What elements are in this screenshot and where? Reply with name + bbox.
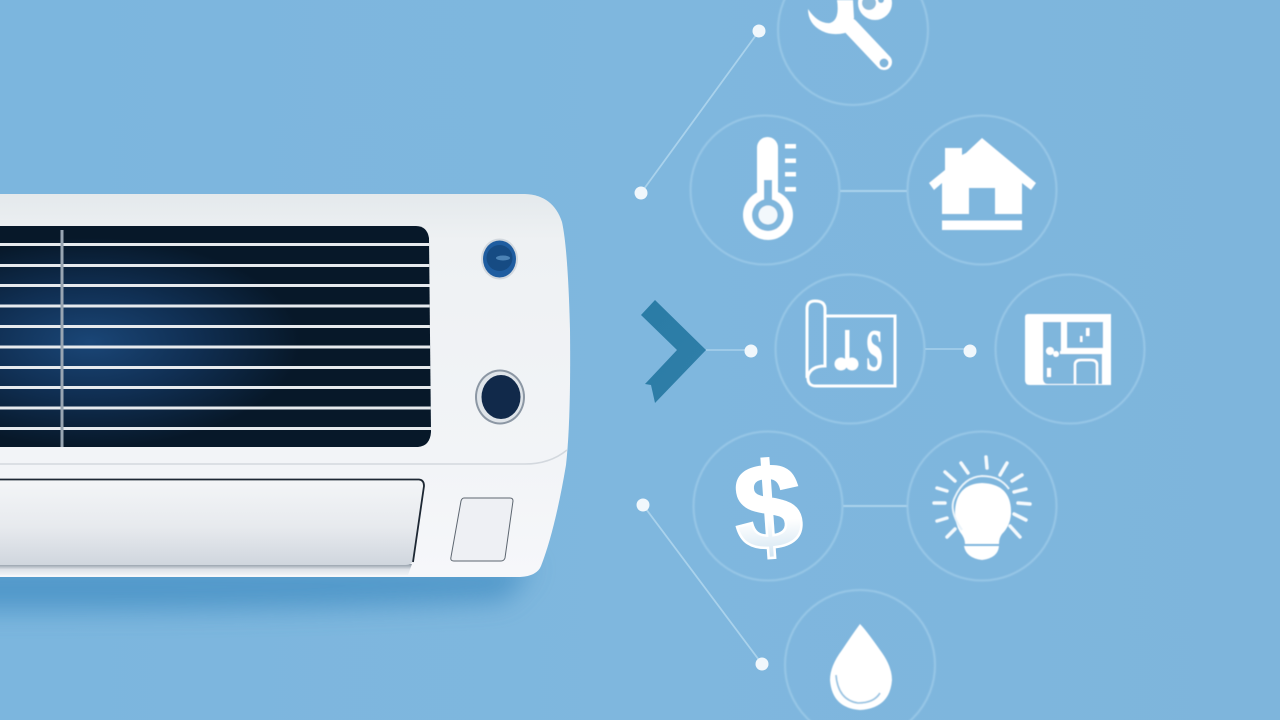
icon: blueprint scroll (807, 296, 895, 389)
icon ring: floor plan (996, 274, 1144, 424)
icon: floor plan (1025, 314, 1111, 385)
icon: house (929, 138, 1036, 230)
icon: wrench and nut (808, 0, 892, 68)
icon ring: blueprint (776, 274, 924, 424)
icon: dollar sign: $ (729, 437, 807, 577)
icon: thermometer (743, 137, 796, 240)
flap top and side edge (0, 480, 424, 562)
housing seam (0, 450, 567, 464)
icon: water drop (830, 624, 892, 710)
icon ring: thermometer (690, 116, 840, 264)
connector: wrench to thermometer node (641, 31, 759, 193)
icon ring: dollar (694, 432, 842, 580)
floor plan speck marks (1046, 328, 1102, 377)
small access panel (451, 498, 513, 561)
connector nodes (634, 24, 976, 670)
air conditioner unit (0, 194, 570, 577)
unit body (0, 194, 570, 577)
louvre slats (0, 243, 432, 430)
blueprint blob right (846, 358, 858, 370)
blue indicator button (481, 238, 518, 280)
icon: light bulb (934, 457, 1030, 560)
air conditioner drop shadow (0, 565, 535, 610)
blueprint letter: s (866, 296, 883, 389)
scale ticks (785, 144, 796, 192)
grille (0, 226, 432, 448)
connector: dollar node to drop (643, 505, 762, 664)
dark round sensor (475, 370, 525, 424)
icon rings (690, 0, 1144, 720)
chevron arrow (641, 300, 706, 403)
front flap (0, 480, 424, 565)
connector: thermometer to house (840, 190, 907, 192)
connector: blueprint to floor plan (925, 348, 965, 350)
icon ring: light bulb (908, 432, 1056, 580)
blueprint blob left (834, 358, 848, 370)
bulb rays (934, 457, 1030, 537)
lower lip (0, 564, 412, 575)
vertical vane (60, 230, 64, 447)
connector: chevron to blueprint (706, 349, 745, 351)
blueprint stem mark (845, 330, 850, 364)
icon ring: house (908, 116, 1056, 264)
icon ring: water drop (785, 590, 935, 720)
connector: dollar to bulb (843, 505, 908, 507)
icon ring: wrench (778, 0, 928, 105)
